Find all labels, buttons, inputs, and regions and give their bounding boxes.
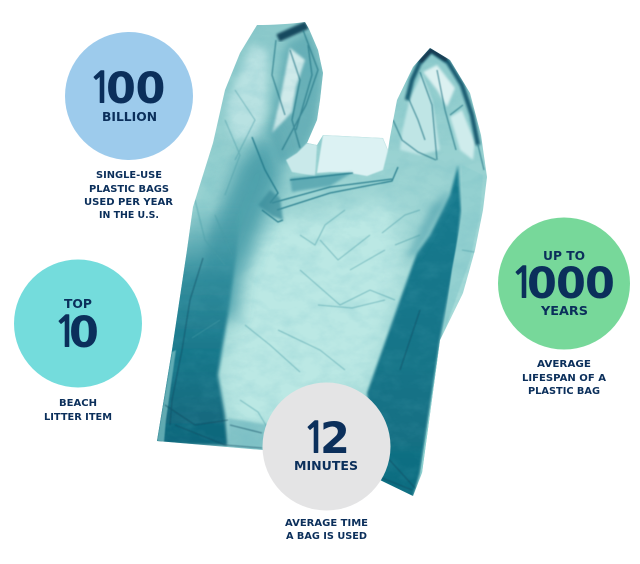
caption: IN THE U.S. bbox=[99, 210, 159, 221]
number 100: 00 bbox=[106, 64, 165, 114]
number 10: 1 bbox=[53, 312, 79, 354]
caption: PLASTIC BAGS bbox=[89, 184, 169, 195]
stat: top 10 bbox=[14, 260, 142, 423]
handle creases bbox=[272, 30, 484, 170]
teal circle bbox=[14, 260, 142, 388]
caption bbox=[522, 359, 606, 397]
caption bbox=[84, 170, 173, 221]
left side shadow bbox=[196, 130, 282, 320]
label up to: UP TO bbox=[543, 248, 585, 263]
left handle inner opening bbox=[272, 48, 305, 133]
number 1000: 1 bbox=[510, 263, 536, 305]
number 1000: 000 bbox=[527, 259, 615, 309]
caption bbox=[44, 398, 112, 423]
left of cut-out bbox=[286, 143, 317, 176]
caption: SINGLE-USE bbox=[96, 170, 162, 181]
paper texture bbox=[186, 54, 481, 476]
body wrinkles bbox=[192, 90, 480, 432]
caption: BEACH bbox=[59, 398, 97, 409]
right handle opening bbox=[423, 65, 455, 107]
caption: A BAG IS USED bbox=[286, 531, 367, 542]
dark wrinkles in bands bbox=[165, 258, 420, 490]
caption: AVERAGE bbox=[537, 359, 591, 370]
caption bbox=[285, 518, 368, 542]
right dark band bbox=[367, 165, 461, 498]
left handle light patch bbox=[226, 45, 268, 140]
bottom left pale edge bbox=[157, 350, 176, 442]
dark band above the main fold bbox=[290, 172, 353, 192]
caption: LIFESPAN OF A bbox=[522, 373, 606, 384]
plastic bag photo bbox=[150, 15, 495, 505]
unit billion: BILLION bbox=[102, 109, 157, 124]
left handle shading bbox=[268, 30, 323, 165]
number 10: 0 bbox=[69, 308, 99, 358]
dark wedge at fold bbox=[258, 190, 283, 220]
number 12: 2 bbox=[320, 414, 350, 464]
blue circle bbox=[65, 32, 193, 160]
dark fold: right handle arc bbox=[407, 50, 478, 145]
caption: AVERAGE TIME bbox=[285, 518, 368, 529]
left dark band bbox=[157, 212, 238, 447]
number 100: 1 bbox=[88, 68, 114, 110]
stat: 100 billion bbox=[65, 32, 193, 221]
stat: 12 minutes bbox=[262, 382, 390, 542]
right handle light area bbox=[400, 74, 440, 155]
number 12: 1 bbox=[302, 418, 328, 460]
caption: LITTER ITEM bbox=[44, 412, 112, 423]
caption: PLASTIC BAG bbox=[528, 386, 600, 397]
unit minutes: MINUTES bbox=[294, 458, 358, 473]
label top: TOP bbox=[64, 296, 92, 311]
main fold creases under the cut-out bbox=[252, 137, 398, 222]
right handle second opening bbox=[450, 110, 475, 160]
grey circle bbox=[262, 382, 390, 510]
caption: USED PER YEAR bbox=[84, 197, 173, 208]
right edge pale strip bbox=[443, 165, 483, 335]
right band soft top bbox=[405, 190, 452, 262]
dark arc crown bbox=[420, 50, 447, 62]
pale strip bottom bbox=[420, 293, 463, 475]
unit years: YEARS bbox=[540, 303, 588, 318]
left outer lighter edge bbox=[198, 147, 217, 210]
green circle bbox=[498, 218, 630, 350]
bottom strip bbox=[228, 417, 266, 450]
dark fold: left handle top bbox=[278, 25, 307, 38]
central cut-out visible through bag bbox=[317, 135, 388, 176]
light centre of the bag bbox=[226, 200, 400, 430]
stat: up to 1000 years bbox=[498, 218, 630, 397]
